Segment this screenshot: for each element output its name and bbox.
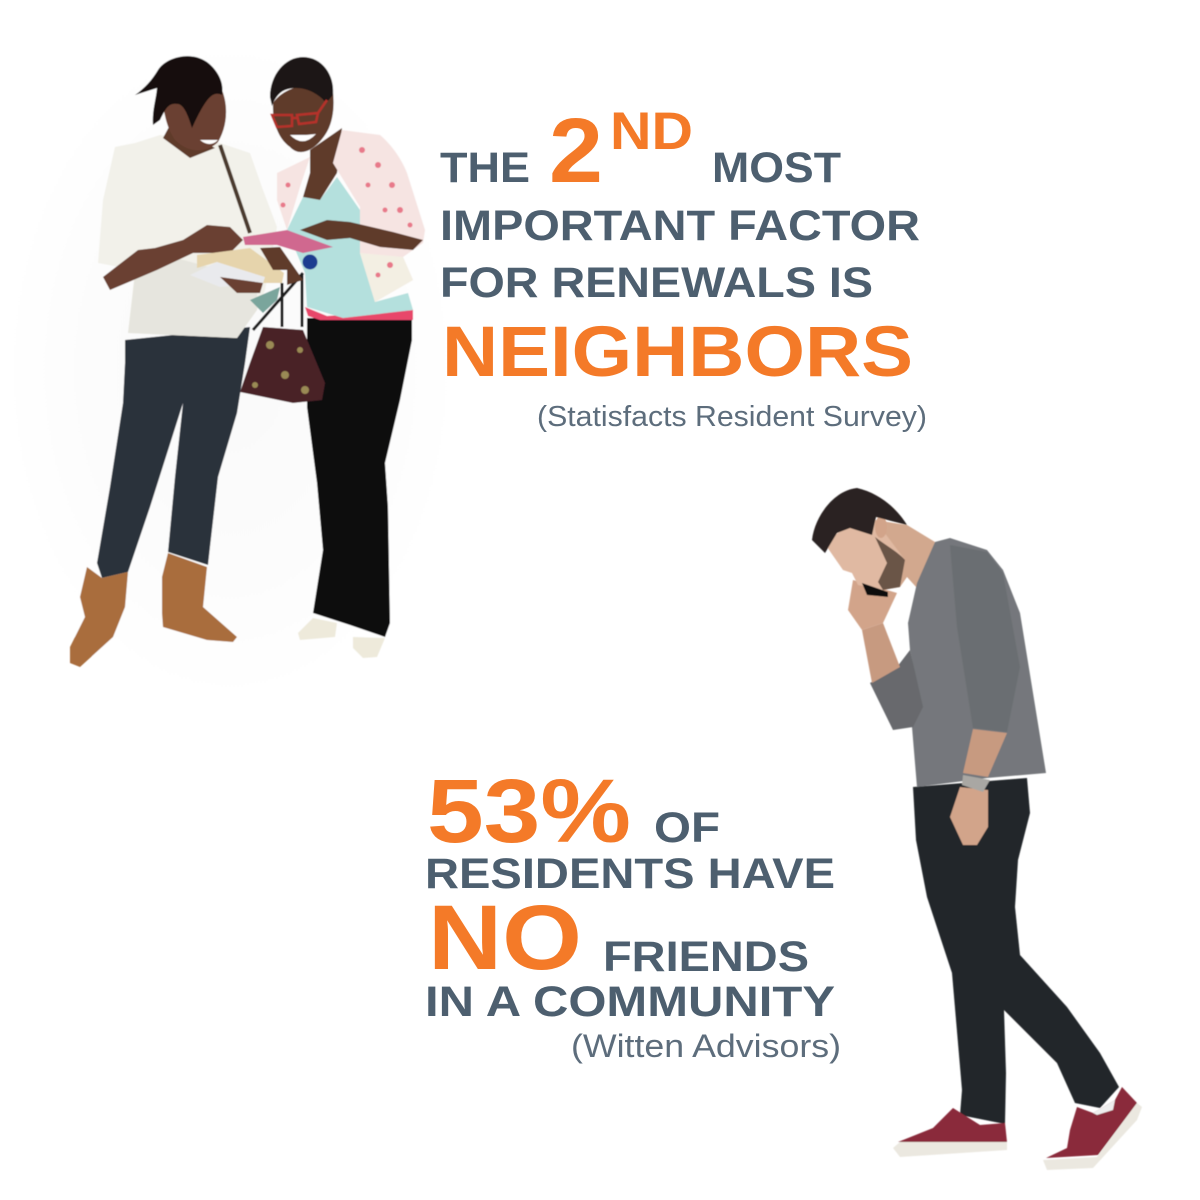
sandals [298, 618, 337, 640]
cardigan [277, 157, 310, 230]
smile [290, 134, 316, 141]
heading: second most important factor: MOST [712, 144, 841, 192]
handbag [240, 254, 325, 403]
heading: second most important factor: ND [610, 102, 693, 161]
jeans [913, 778, 1119, 1124]
blouse [98, 135, 277, 338]
photo: two women reading together [0, 20, 470, 720]
books and magazine [190, 220, 423, 313]
neck [163, 125, 215, 158]
left woman [70, 56, 277, 667]
hair [135, 56, 222, 128]
ear [875, 516, 887, 538]
statistic: no friends: OF [654, 804, 720, 852]
heading: second most important factor: FOR RENEWALS IS [440, 259, 873, 307]
sweater right sleeve [950, 545, 1020, 732]
glasses [272, 100, 327, 127]
face [163, 84, 226, 150]
statistic: no friends: 53% [427, 762, 631, 862]
black trousers [307, 318, 412, 637]
heading: second most important factor [440, 100, 920, 392]
arm [103, 225, 243, 290]
beard [875, 537, 905, 590]
sleeve left [870, 650, 923, 730]
right forearm [963, 729, 1007, 777]
heading: second most important factor: NEIGHBORS [442, 313, 913, 392]
heading: second most important factor: 2 [549, 100, 603, 202]
phone [862, 583, 888, 597]
statistic: no friends: RESIDENTS HAVE [425, 850, 835, 898]
watch [962, 775, 990, 792]
jeans [97, 327, 250, 578]
statistic: no friends [425, 762, 835, 1026]
sweater body [908, 538, 1046, 787]
face [827, 520, 905, 590]
statistic: no friends: FRIENDS [603, 933, 809, 981]
chest and neck [303, 128, 342, 200]
lower hand [950, 787, 988, 845]
forearm [862, 623, 900, 683]
statistic: no friends: NO [428, 887, 582, 989]
right woman [270, 57, 425, 658]
hair [812, 488, 907, 553]
smile [200, 140, 218, 144]
heading: second most important factor: THE [440, 144, 530, 192]
source: Statisfacts: (Statisfacts Resident Survey) [537, 401, 927, 433]
heading: second most important factor: IMPORTANT FACTOR [440, 202, 920, 250]
hand at phone [848, 580, 897, 630]
hair [270, 57, 333, 106]
face [273, 85, 334, 152]
bag strap [220, 145, 250, 233]
neck [875, 520, 935, 588]
photo: man on phone [812, 488, 1142, 1170]
shoe left [898, 1108, 1007, 1142]
shoe right [1046, 1087, 1137, 1158]
teal top [287, 177, 413, 318]
statistic: no friends: IN A COMMUNITY [425, 978, 835, 1026]
pink waistband [305, 307, 413, 320]
source: Witten Advisors: (Witten Advisors) [571, 1028, 841, 1064]
boots [70, 567, 128, 667]
